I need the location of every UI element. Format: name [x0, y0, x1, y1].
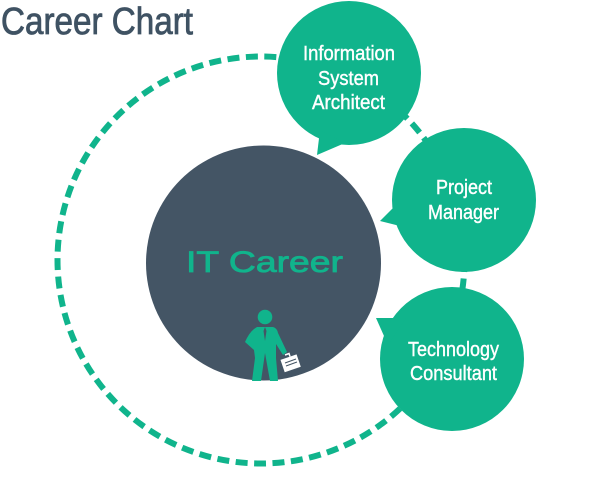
speech bubble: Project Manager: [380, 128, 536, 272]
speech bubble: Information System Architect: Architect: [312, 92, 385, 114]
speech bubble: Information System Architect: Information: [303, 43, 395, 65]
icon: businessman with briefcase: [245, 310, 301, 381]
dashed career path ring: [58, 56, 464, 464]
central label: IT Career: [186, 246, 343, 279]
speech bubble: Information System Architect: [277, 1, 421, 155]
speech bubble: Technology Consultant: Consultant: [410, 363, 497, 385]
central circle: IT Career: [146, 146, 381, 381]
speech bubble: Project Manager: Project: [436, 177, 492, 199]
speech bubble: Technology Consultant: [376, 287, 524, 431]
speech bubble: Project Manager: Manager: [428, 202, 499, 224]
title: Career Chart: [1, 1, 193, 43]
speech bubble: Information System Architect: System: [318, 68, 379, 90]
speech bubble: Technology Consultant: Technology: [408, 339, 499, 361]
